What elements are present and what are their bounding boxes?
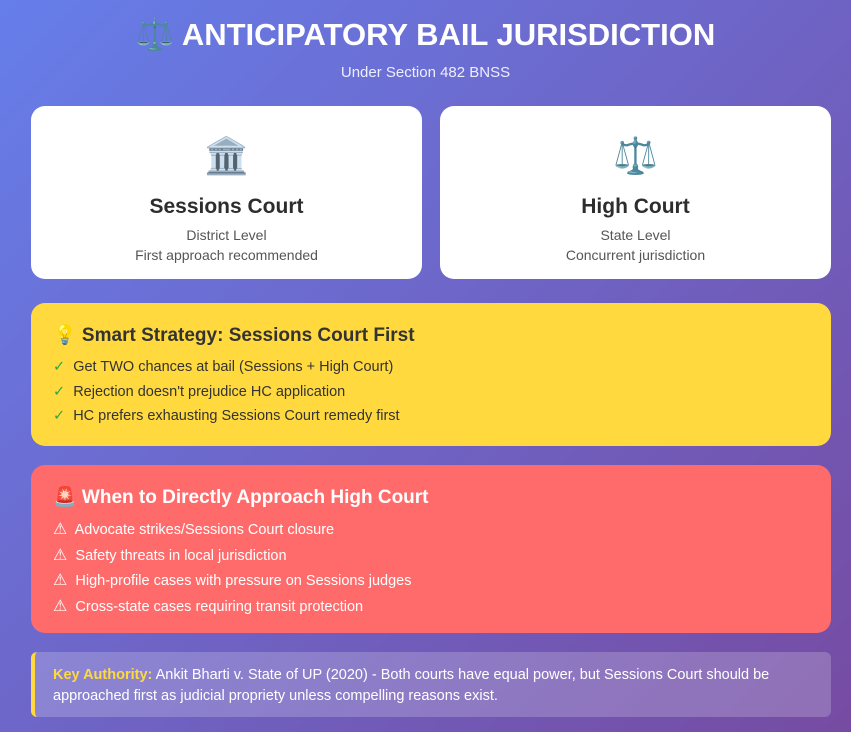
- card: sessions court: First approach recommended: [135, 247, 318, 263]
- list: reasons: ⚠ Advocate strikes/Sessions Court closure: [53, 519, 334, 538]
- list: strategy points: ✓ HC prefers exhausting Sessions Court remedy first: [53, 408, 400, 424]
- icon: scales: ⚖️: [613, 135, 658, 176]
- list: reasons: [53, 519, 412, 614]
- card: high court: Concurrent jurisdiction: [566, 247, 705, 263]
- list: strategy points: [53, 359, 400, 424]
- subtitle: Under Section 482 BNSS: [341, 64, 510, 81]
- list: reasons: ⚠ Cross-state cases requiring transit protection: [53, 596, 363, 614]
- icon: court building: 🏛️: [204, 135, 249, 176]
- list: strategy points: ✓ Get TWO chances at bail (Sessions + High Court): [53, 359, 393, 375]
- card: sessions court: District Level: [186, 227, 267, 243]
- card: high court: State Level: [600, 227, 671, 243]
- callout: key authority: [31, 652, 831, 717]
- card: sessions court: Sessions Court: [149, 195, 304, 218]
- list: reasons: ⚠ Safety threats in local jurisdiction: [53, 544, 287, 564]
- panel: smart strategy: [31, 303, 831, 446]
- callout: key authority: Key Authority: Ankit Bharti v. State of UP (2020) - Both courts have equal power, but Sessions Court should be approached first as judicial propriety unless compelling reasons exist.: [53, 667, 769, 704]
- heading: smart strategy: 💡 Smart Strategy: Sessions Court First: [53, 325, 415, 346]
- title: ⚖️ ANTICIPATORY BAIL JURISDICTION: [136, 17, 715, 52]
- card: high court: [440, 106, 831, 279]
- heading: when to approach HC: 🚨 When to Directly Approach High Court: [53, 487, 429, 508]
- list: strategy points: ✓ Rejection doesn't prejudice HC application: [53, 384, 345, 400]
- card: high court: High Court: [581, 195, 690, 218]
- list: reasons: ⚠ High-profile cases with pressure on Sessions judges: [53, 570, 412, 589]
- panel: directly approach high court: [31, 465, 831, 633]
- card: sessions court: [31, 106, 422, 279]
